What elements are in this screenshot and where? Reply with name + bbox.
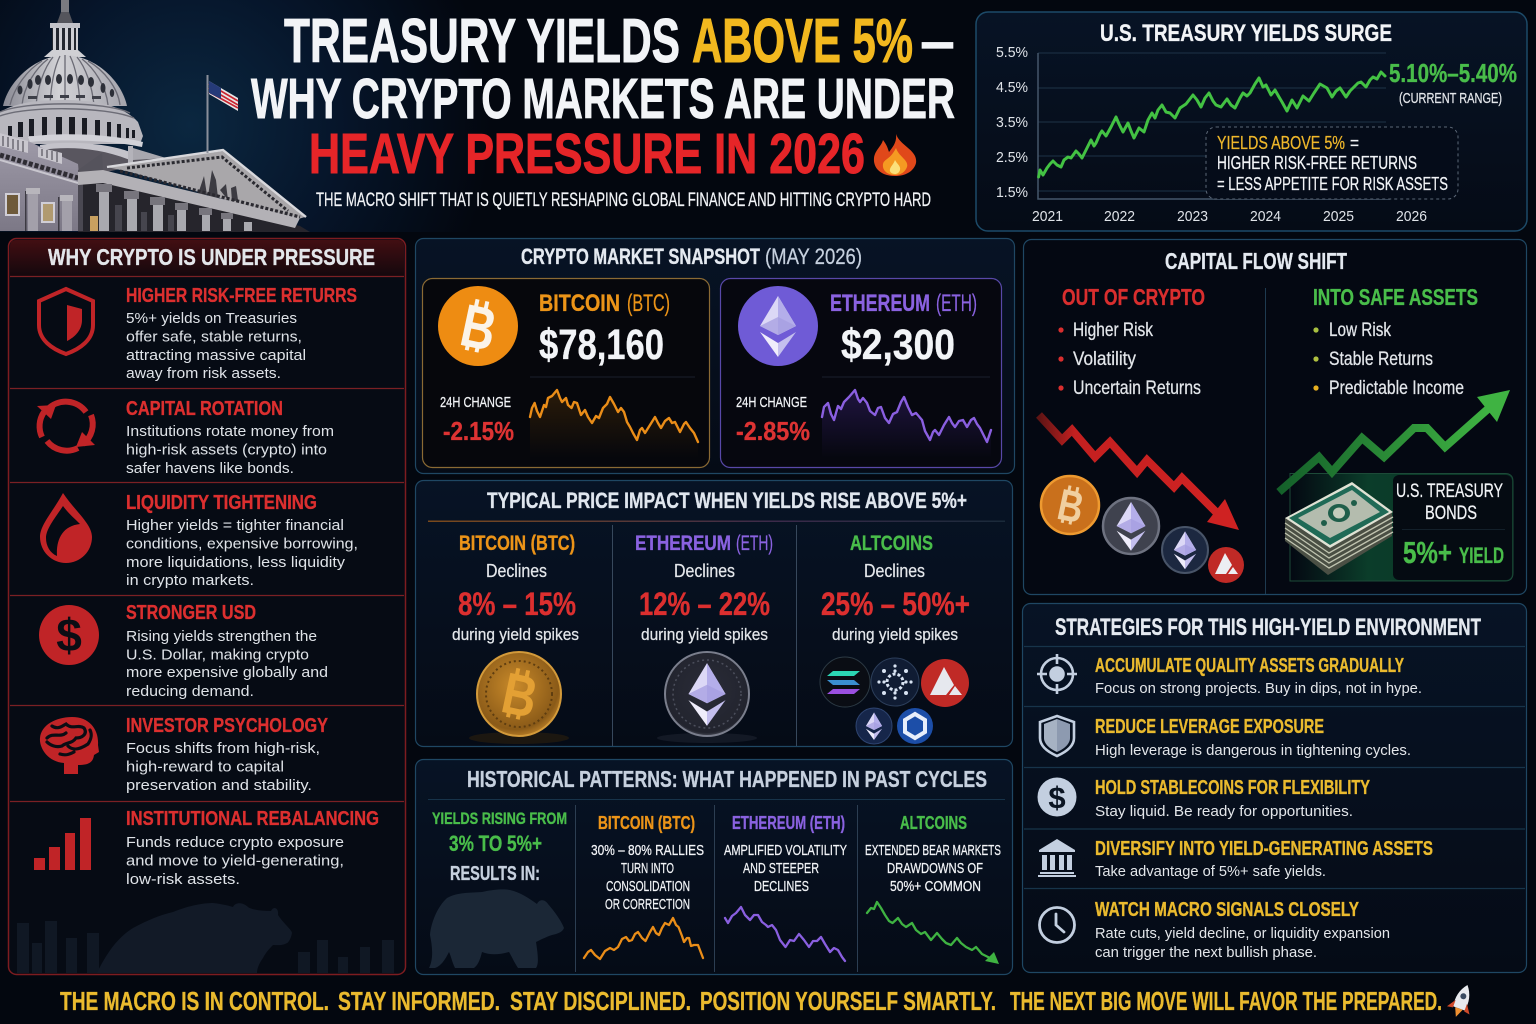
y axis labels: 5.5% bbox=[996, 44, 1028, 61]
item: stablecoins: HOLD STABLECOINS FOR FLEXIBILITY bbox=[1095, 777, 1370, 799]
column: yields rising bbox=[429, 809, 567, 968]
footer tagline: STAY INFORMED. bbox=[338, 986, 500, 1016]
sparkline: ethereum bbox=[822, 390, 991, 458]
item: higher risk-free returns: attracting massive capital bbox=[126, 347, 306, 364]
column: altcoins: ALTCOINS bbox=[900, 813, 967, 833]
illustration: bear bbox=[97, 903, 292, 973]
column: bitcoin: BITCOIN (BTC) bbox=[598, 813, 695, 833]
panel: historical patterns bbox=[416, 760, 1012, 974]
item: stablecoins bbox=[1038, 777, 1370, 820]
card: treasury bonds bbox=[1285, 474, 1513, 581]
sparkline: bitcoin bbox=[584, 918, 703, 959]
column: ethereum bbox=[635, 532, 773, 743]
list: safe benefits: Stable Returns bbox=[1329, 349, 1433, 370]
item: stronger USD: reducing demand. bbox=[126, 683, 254, 700]
title: TREASURY YIELDS bbox=[284, 7, 680, 76]
column: bitcoin: CONSOLIDATION bbox=[606, 878, 690, 895]
item: capital rotation: CAPITAL ROTATION bbox=[126, 398, 283, 420]
column: bitcoin: TURN INTO bbox=[621, 860, 674, 877]
illustration: US Capitol bbox=[0, 0, 310, 232]
sparkline: ethereum bbox=[725, 907, 845, 961]
column: bitcoin: during yield spikes bbox=[452, 625, 579, 644]
column: ethereum: 12% – 22% bbox=[639, 586, 770, 622]
icon: ethereum coin small bbox=[1162, 527, 1208, 573]
card: bitcoin: BITCOIN bbox=[539, 290, 620, 317]
x axis labels: 2022 bbox=[1104, 208, 1135, 225]
footer tagline: STAY DISCIPLINED. bbox=[510, 986, 691, 1016]
icon: bars bbox=[34, 818, 91, 870]
column: into safe assets: INTO SAFE ASSETS bbox=[1313, 284, 1478, 310]
item: higher risk-free returns bbox=[39, 285, 357, 382]
heading: TYPICAL PRICE IMPACT WHEN YIELDS RISE ABOVE 5%+ bbox=[487, 488, 967, 513]
item: reduce leverage: REDUCE LEVERAGE EXPOSURE bbox=[1095, 716, 1324, 738]
icon: rocket bbox=[1445, 981, 1479, 1021]
chart heading: U.S. TREASURY YIELDS SURGE bbox=[1100, 20, 1392, 47]
heading: HISTORICAL PATTERNS: WHAT HAPPENED IN PAST CYCLES bbox=[467, 766, 987, 792]
y axis labels bbox=[996, 44, 1028, 201]
label: current range bbox=[1389, 58, 1517, 107]
item: stronger USD bbox=[39, 602, 328, 700]
card: ethereum: 24H CHANGE bbox=[736, 394, 807, 411]
column: yields rising: YIELDS RISING FROM bbox=[432, 809, 567, 828]
column: altcoins: Declines bbox=[864, 561, 925, 581]
item: capital rotation: high-risk assets (crypto) into bbox=[126, 442, 327, 458]
icon: bitcoin coin bbox=[1041, 476, 1099, 534]
y axis labels: 3.5% bbox=[996, 114, 1028, 131]
column: ethereum: Declines bbox=[674, 561, 735, 581]
icon: gold bitcoin coin bbox=[469, 652, 569, 744]
item: capital rotation: safer havens like bonds. bbox=[126, 460, 294, 477]
footer tagline bbox=[60, 986, 1442, 1016]
icon: bitcoin bbox=[438, 286, 518, 366]
column: ethereum: during yield spikes bbox=[641, 625, 768, 644]
header sky glow bbox=[0, 0, 970, 232]
central portico bbox=[78, 153, 103, 184]
callout: yields above 5% bbox=[1206, 127, 1458, 199]
x axis labels: 2025 bbox=[1323, 208, 1354, 225]
column: ethereum: ETHEREUM bbox=[635, 532, 731, 555]
drum bbox=[0, 100, 143, 144]
left wing bbox=[0, 133, 84, 231]
icon: bitcoin: B bbox=[455, 291, 502, 364]
panel: strategies bbox=[1022, 604, 1526, 972]
column: bitcoin: OR CORRECTION bbox=[605, 896, 690, 913]
column: bitcoin bbox=[584, 813, 704, 959]
panel: U.S. Treasury yields chart bbox=[976, 12, 1527, 231]
item: investor psychology: INVESTOR PSYCHOLOGY bbox=[126, 715, 329, 737]
card: ethereum: ETHEREUM bbox=[830, 290, 930, 317]
card: bitcoin: -2.15% bbox=[443, 416, 514, 446]
pediment sculpture bbox=[198, 170, 238, 202]
list: crypto risks: Volatility bbox=[1073, 349, 1136, 370]
card: bitcoin: 24H CHANGE bbox=[440, 394, 511, 411]
title: ABOVE 5% bbox=[692, 7, 913, 76]
item: investor psychology: Focus shifts from high-risk, bbox=[126, 740, 320, 757]
item: investor psychology: high-reward to capital bbox=[126, 758, 284, 776]
icon: dollar: $ bbox=[1048, 780, 1066, 815]
item: stablecoins: Stay liquid. Be ready for opportunities. bbox=[1095, 804, 1353, 820]
icon: fire bbox=[874, 134, 916, 176]
icon: drop bbox=[40, 493, 92, 563]
item: stronger USD: STRONGER USD bbox=[126, 602, 256, 624]
item: stronger USD: U.S. Dollar, making crypto bbox=[126, 646, 309, 664]
item: higher risk-free returns: offer safe, stable returns, bbox=[126, 328, 302, 346]
item: reduce leverage bbox=[1040, 716, 1411, 759]
x axis labels: 2021 bbox=[1032, 208, 1063, 225]
card: ethereum: (ETH) bbox=[936, 290, 977, 317]
item: higher risk-free returns: 5%+ yields on Treasuries bbox=[126, 310, 297, 327]
panel: capital flow shift bbox=[1024, 240, 1526, 594]
icon: shield bbox=[39, 289, 93, 354]
column: bitcoin: 8% – 15% bbox=[458, 586, 576, 622]
column: altcoins bbox=[865, 813, 1001, 964]
icon: silver ethereum coin bbox=[657, 652, 757, 743]
footer tagline: POSITION YOURSELF SMARTLY. bbox=[700, 986, 996, 1016]
list: safe benefits: Predictable Income bbox=[1329, 378, 1464, 399]
item: diversify bbox=[1038, 838, 1433, 880]
item: watch macro: can trigger the next bullish phase. bbox=[1095, 945, 1317, 961]
column: yields rising: 3% TO 5%+ bbox=[449, 831, 542, 856]
item: liquidity tightening: more liquidations, less liquidity bbox=[126, 554, 346, 571]
icon: ethereum coin bbox=[1103, 498, 1159, 554]
item: capital rotation bbox=[37, 398, 334, 477]
item: institutional rebalancing: INSTITUTIONAL REBALANCING bbox=[126, 808, 379, 830]
item: accumulate: Focus on strong projects. Buy in dips, not in hype. bbox=[1095, 681, 1422, 697]
panel: why crypto is under pressure bbox=[8, 238, 406, 974]
column: yields rising: RESULTS IN: bbox=[450, 863, 540, 885]
item: institutional rebalancing: low-risk assets. bbox=[126, 871, 240, 888]
card: bitcoin: (BTC) bbox=[627, 290, 670, 317]
column: out of crypto: OUT OF CRYPTO bbox=[1062, 284, 1205, 310]
card: treasury bonds: 5%+ bbox=[1403, 535, 1452, 570]
icon: cardano bbox=[871, 658, 919, 706]
statue and lantern bbox=[44, 0, 86, 57]
icon: dollar bbox=[39, 605, 99, 665]
column: ethereum: AMPLIFIED VOLATILITY bbox=[724, 842, 847, 859]
item: watch macro: WATCH MACRO SIGNALS CLOSELY bbox=[1095, 899, 1359, 921]
title bbox=[251, 7, 955, 186]
column: bitcoin: Declines bbox=[486, 561, 547, 581]
column: altcoins: 25% – 50%+ bbox=[821, 586, 970, 622]
item: liquidity tightening: in crypto markets. bbox=[126, 572, 254, 589]
item: accumulate: ACCUMULATE QUALITY ASSETS GRADUALLY bbox=[1095, 655, 1404, 677]
card: bitcoin: $78,160 bbox=[539, 321, 664, 369]
icon: dollar: $ bbox=[56, 609, 82, 661]
illustration: bear bbox=[429, 889, 564, 968]
icon: shield bbox=[1040, 716, 1074, 756]
icon: chainlink bbox=[897, 708, 933, 744]
icon: solana bbox=[820, 657, 870, 707]
column: ethereum: ETHEREUM (ETH) bbox=[732, 813, 845, 833]
icon: ethereum bbox=[738, 286, 818, 366]
column: bitcoin bbox=[452, 532, 579, 744]
item: capital rotation: Institutions rotate money from bbox=[126, 423, 334, 440]
card: bitcoin bbox=[422, 278, 710, 468]
sparkline: altcoins with arrow bbox=[867, 902, 999, 964]
item: diversify: Take advantage of 5%+ safe yields. bbox=[1095, 864, 1326, 880]
icon: brain bbox=[40, 717, 99, 774]
title: – bbox=[920, 7, 955, 76]
flag bbox=[206, 75, 238, 153]
column: altcoins: 50%+ COMMON bbox=[890, 878, 981, 895]
label: current range: (CURRENT RANGE) bbox=[1399, 90, 1502, 107]
item: watch macro bbox=[1040, 899, 1390, 961]
list: safe benefits bbox=[1313, 320, 1464, 399]
icon: avalanche coin bbox=[1208, 547, 1244, 583]
list: safe benefits: Low Risk bbox=[1329, 320, 1391, 341]
arrow: rising bbox=[1279, 390, 1510, 492]
icon: rotation arrows bbox=[37, 402, 95, 451]
item: accumulate bbox=[1037, 654, 1422, 697]
heading: WHY CRYPTO IS UNDER PRESSURE bbox=[48, 244, 375, 270]
callout: yields above 5%: HIGHER RISK-FREE RETURNS bbox=[1217, 153, 1417, 173]
column: altcoins: EXTENDED BEAR MARKETS bbox=[865, 842, 1001, 859]
column: into safe assets bbox=[1279, 284, 1513, 581]
line: yields bbox=[1039, 72, 1385, 177]
card: ethereum: -2.85% bbox=[736, 416, 810, 446]
list: crypto risks bbox=[1058, 320, 1201, 399]
column: bitcoin: BITCOIN (BTC) bbox=[459, 532, 575, 555]
item: liquidity tightening: LIQUIDITY TIGHTENING bbox=[126, 492, 317, 514]
dome bbox=[3, 55, 127, 106]
list: crypto risks: Higher Risk bbox=[1073, 320, 1153, 341]
y axis labels: 4.5% bbox=[996, 79, 1028, 96]
icon: gold bitcoin coin: B bbox=[496, 660, 543, 731]
item: institutional rebalancing bbox=[34, 808, 379, 888]
title: HEAVY PRESSURE IN 2026 bbox=[309, 122, 865, 186]
x axis labels bbox=[1032, 208, 1427, 225]
sparkline: bitcoin bbox=[530, 390, 698, 458]
skyline bars decoration bbox=[17, 921, 394, 973]
card: treasury bonds: YIELD bbox=[1459, 543, 1504, 568]
icon: small ethereum bbox=[856, 708, 892, 744]
item: higher risk-free returns: away from risk assets. bbox=[126, 365, 281, 382]
column: altcoins: DRAWDOWNS OF bbox=[887, 860, 983, 877]
column: out of crypto bbox=[1039, 284, 1244, 583]
icon: dollar bbox=[1038, 778, 1076, 816]
panel: crypto market snapshot bbox=[416, 238, 1014, 474]
card: ethereum: $2,300 bbox=[841, 321, 955, 369]
icon: bitcoin coin: B bbox=[1053, 480, 1088, 533]
icon: target bbox=[1037, 654, 1077, 694]
card: ethereum bbox=[720, 278, 1002, 468]
item: liquidity tightening bbox=[40, 492, 358, 589]
column: ethereum: DECLINES bbox=[754, 878, 809, 895]
column: altcoins bbox=[820, 532, 970, 744]
x axis labels: 2026 bbox=[1396, 208, 1427, 225]
column: ethereum: (ETH) bbox=[736, 532, 773, 555]
item: liquidity tightening: Higher yields = tighter financial bbox=[126, 517, 344, 534]
item: watch macro: Rate cuts, yield decline, or liquidity expansion bbox=[1095, 926, 1390, 942]
item: investor psychology bbox=[40, 715, 329, 794]
item: stronger USD: more expensive globally and bbox=[126, 664, 328, 681]
base under drum bbox=[40, 145, 168, 178]
subtitle: THE MACRO SHIFT THAT IS QUIETLY RESHAPING GLOBAL FINANCE AND HITTING CRYPTO HARD bbox=[316, 190, 931, 211]
item: stronger USD: Rising yields strengthen the bbox=[126, 628, 317, 645]
heading: (MAY 2026) bbox=[765, 244, 862, 269]
item: diversify: DIVERSIFY INTO YIELD-GENERATING ASSETS bbox=[1095, 838, 1433, 860]
column: altcoins: during yield spikes bbox=[832, 625, 958, 644]
column: ethereum bbox=[724, 813, 847, 961]
y axis labels: 1.5% bbox=[996, 184, 1028, 201]
callout: yields above 5%: YIELDS ABOVE 5% bbox=[1217, 133, 1345, 153]
column: ethereum: AND STEEPER bbox=[743, 860, 819, 877]
list: crypto risks: Uncertain Returns bbox=[1073, 378, 1201, 399]
arrow: falling bbox=[1039, 415, 1239, 530]
icon: banknote stack bbox=[1285, 482, 1393, 575]
item: investor psychology: preservation and stability. bbox=[126, 777, 312, 794]
item: liquidity tightening: conditions, expensive borrowing, bbox=[126, 536, 358, 552]
title: WHY CRYPTO MARKETS ARE UNDER bbox=[251, 67, 955, 131]
icon: clock bbox=[1040, 908, 1074, 942]
icon: avalanche bbox=[921, 659, 969, 707]
x axis labels: 2023 bbox=[1177, 208, 1208, 225]
heading: CAPITAL FLOW SHIFT bbox=[1165, 248, 1347, 274]
heading: CRYPTO MARKET SNAPSHOT bbox=[521, 244, 760, 269]
column: altcoins: ALTCOINS bbox=[850, 532, 933, 555]
item: higher risk-free returns: HIGHER RISK-FREE RETURRS bbox=[126, 285, 357, 307]
footer tagline: THE MACRO IS IN CONTROL. bbox=[60, 986, 329, 1016]
item: reduce leverage: High leverage is dangerous in tightening cycles. bbox=[1095, 743, 1411, 759]
icon: bank bbox=[1038, 839, 1076, 877]
callout: yields above 5%: = LESS APPETITE FOR RISK ASSETS bbox=[1217, 174, 1448, 194]
x axis labels: 2024 bbox=[1250, 208, 1281, 225]
item: institutional rebalancing: and move to yield-generating, bbox=[126, 852, 344, 870]
card: treasury bonds: BONDS bbox=[1425, 503, 1477, 524]
column: bitcoin: 30% – 80% RALLIES bbox=[591, 842, 704, 859]
panel: typical price impact bbox=[416, 480, 1012, 746]
callout: yields above 5%: = bbox=[1350, 133, 1359, 153]
y axis labels: 2.5% bbox=[996, 149, 1028, 166]
item: institutional rebalancing: Funds reduce crypto exposure bbox=[126, 834, 344, 851]
